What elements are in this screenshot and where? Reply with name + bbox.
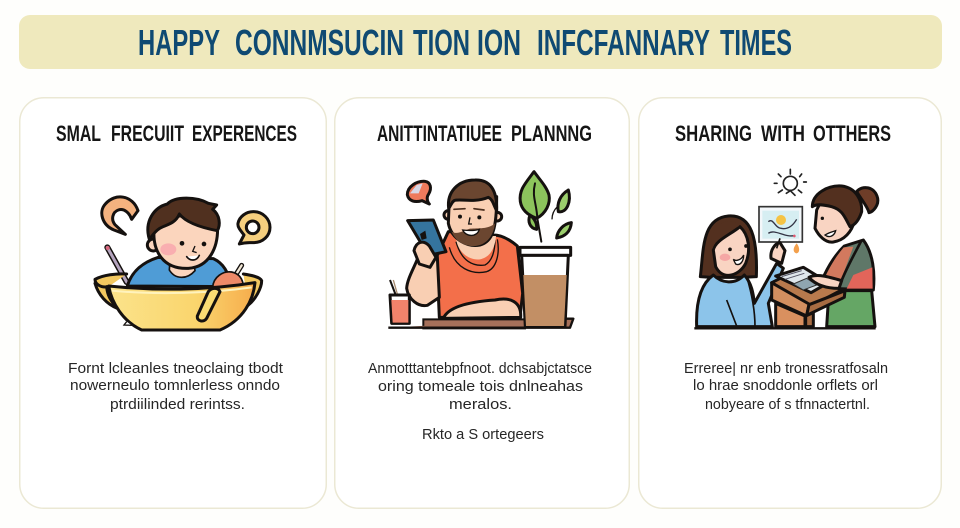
woman hand [809,276,842,288]
picture card [759,207,802,253]
body text [368,361,592,443]
floor line [694,325,876,332]
hand [414,242,436,267]
light bulb [774,169,806,195]
cheek [160,243,176,255]
panel heading: PLANNNG [511,121,592,146]
hair [148,198,219,239]
body text: ptrdiilinded rerintss. [110,397,245,413]
body text: lo hrae snoddonle orflets orl [693,378,878,394]
panel heading: FRECUIIT [111,121,184,146]
orange shirt [437,232,523,317]
title: INFCFANNARY [537,22,710,63]
large leaf [520,172,549,242]
icon: boy in a bowl [95,197,270,330]
ear [147,239,159,251]
eyes and mouth [454,209,484,235]
forearm on table [443,299,521,318]
title: TIMES [720,22,792,63]
left speech bubble [102,197,138,234]
neck [169,260,195,277]
speech bubble [407,181,430,204]
neck [456,236,496,259]
title: HAPPY [138,22,220,63]
girl hand with pen [771,238,785,263]
bowl [95,274,262,330]
ears [444,211,502,221]
girl fringe and features [712,221,748,264]
title: ION [477,22,521,63]
panel: sharing with others [639,98,941,508]
panel heading: OTTHERS [813,121,891,146]
body text [684,361,888,413]
title banner [19,15,942,69]
panel heading: ANITTINTATIUEE [377,121,502,146]
face [448,197,497,245]
green skirt [827,291,875,327]
body text: Fornt lcleanles tneoclaing tbodt [68,361,283,377]
pot [520,247,571,327]
woman hair [812,186,862,227]
open book [776,267,828,293]
eyes and mouth [180,241,206,260]
panel heading [56,121,297,146]
face [154,215,218,268]
hair [448,180,497,211]
woman face [815,197,855,242]
drink glass [390,280,409,323]
girl face [713,227,749,275]
right speech bubble [238,212,270,244]
panel heading: WITH [761,121,805,146]
table [388,319,573,328]
icon: woman and girl sharing [694,169,878,328]
apple [213,265,243,287]
beard [451,223,495,246]
woman ponytail [857,188,878,213]
body text: nowerneulo tomnlerless onndo [70,378,280,394]
panel heading: SHARING [675,121,752,146]
blue shirt [127,257,232,287]
blue top [697,263,783,327]
body text: Anmotttantebpfnoot. dchsabjctatsce [368,361,592,377]
phone [408,220,446,255]
panel: small frequent experiences [20,98,326,508]
body text: meralos. [449,397,512,413]
girl hair back [700,216,757,277]
woman smile [821,217,836,237]
body text: oring tomeale tois dnlneahas [378,379,583,395]
woman body [824,240,874,290]
podium [772,268,845,327]
body text: Erreree| nr enb tronessratfosaln [684,361,888,377]
panel heading: SMAL [56,121,101,146]
panel heading: EXPERENCES [192,121,297,146]
collar [449,239,498,272]
pencil [106,246,127,282]
body text: nobyeare of s tfnnactertnl. [705,397,870,413]
body text [68,361,283,413]
small leaves [552,190,571,238]
body text: Rkto a S ortegeers [422,427,544,443]
panel heading [675,121,891,146]
arm [407,245,439,306]
title: CONNMSUCIN [235,22,404,63]
title [138,22,792,63]
icon: man with phone and plant [388,172,573,328]
title: TION [413,22,470,63]
panel: anticipative planning [335,98,629,508]
